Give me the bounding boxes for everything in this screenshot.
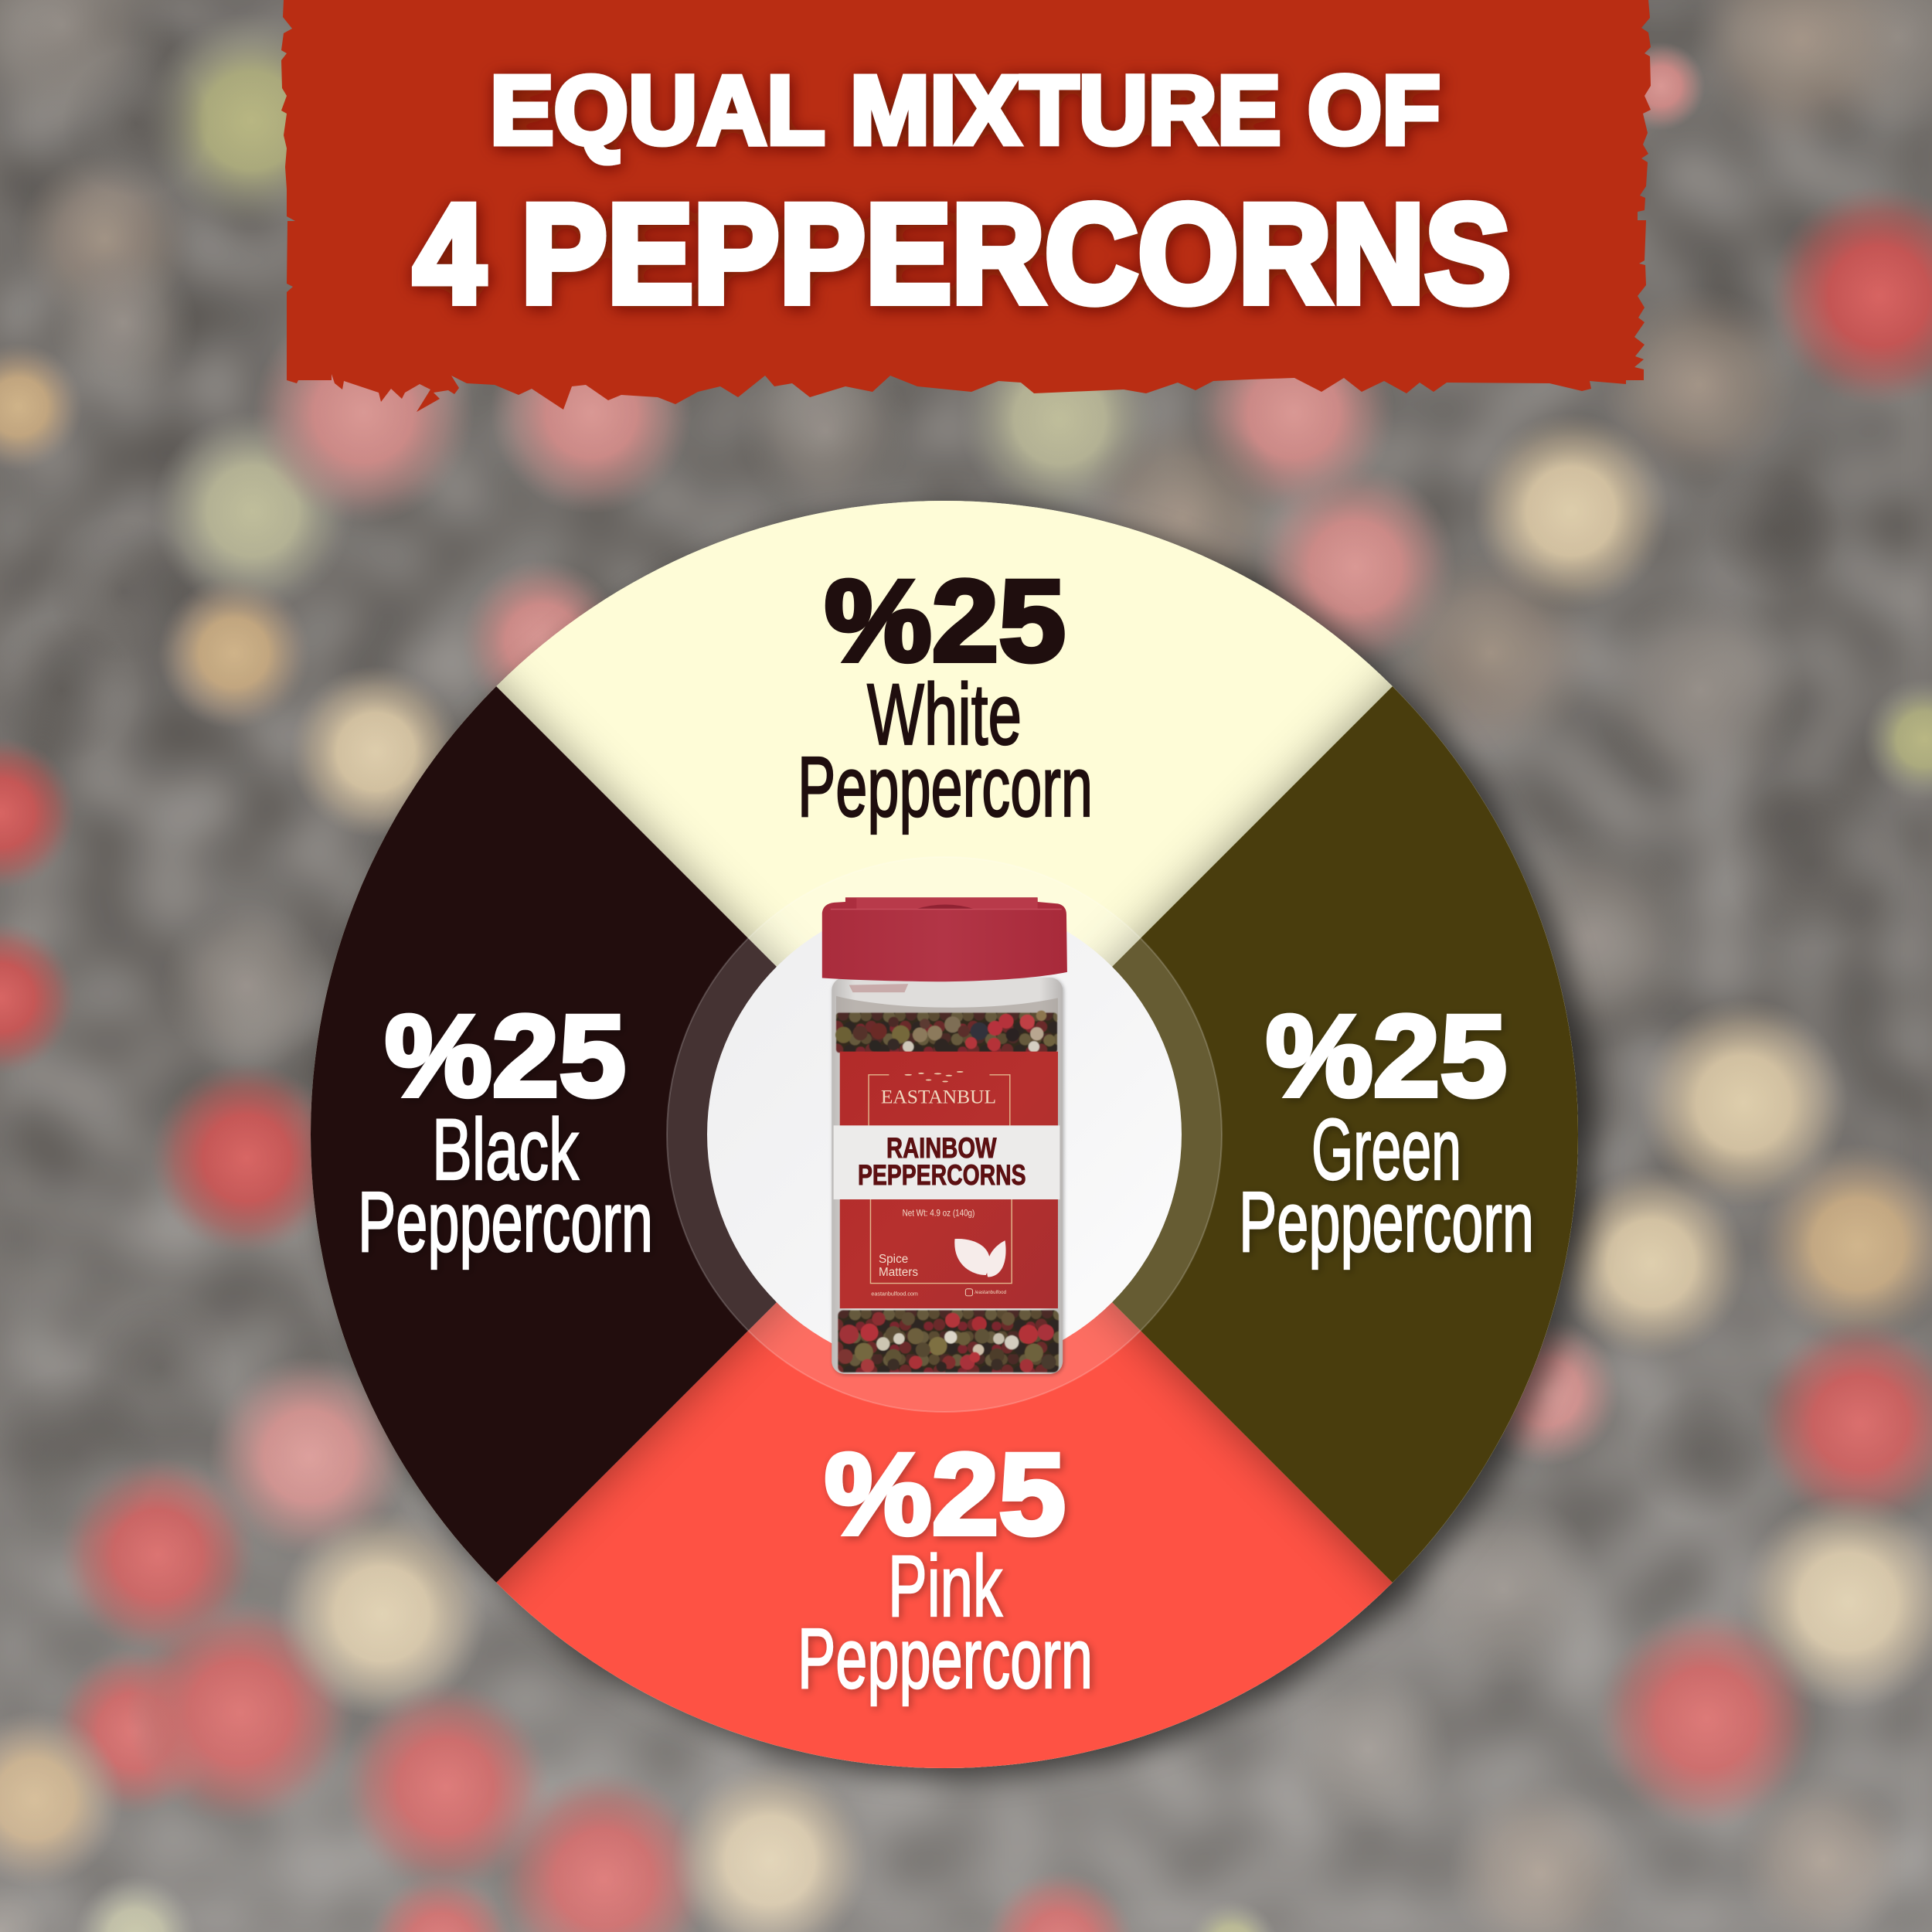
- jar cap: [822, 897, 1067, 981]
- title line 2: 4 PEPPERCORNS: [413, 175, 1511, 332]
- label: black peppercorn: [358, 991, 653, 1270]
- label: green peppercorn: Green: [1311, 1101, 1461, 1198]
- label: green peppercorn: [1239, 991, 1534, 1270]
- banner shape: [281, 0, 1651, 412]
- label: black peppercorn: Peppercorn: [358, 1175, 653, 1270]
- banner: torn red header: [281, 0, 1651, 412]
- label: white peppercorn: %25: [825, 556, 1066, 685]
- label: pink peppercorn: %25: [825, 1429, 1066, 1559]
- label: green peppercorn: %25: [1266, 991, 1507, 1121]
- label: white peppercorn: [798, 556, 1093, 835]
- title line 1: EQUAL MIXTURE OF: [490, 56, 1440, 165]
- label: white peppercorn: White: [867, 666, 1022, 763]
- jar body: [832, 978, 1063, 1374]
- label: pink peppercorn: [798, 1429, 1093, 1706]
- tagline: [879, 1253, 918, 1279]
- tagline: Spice: [879, 1253, 908, 1266]
- label: green peppercorn: Peppercorn: [1239, 1175, 1534, 1270]
- sector: black peppercorn: [311, 665, 798, 1604]
- label: pink peppercorn: Pink: [888, 1538, 1003, 1634]
- sector: green peppercorn: [1090, 665, 1578, 1604]
- social handle: /eastanbulfood: [975, 1290, 1007, 1295]
- product name: PEPPERCORNS: [858, 1158, 1026, 1191]
- sector: white peppercorn: [496, 501, 1393, 686]
- label: white peppercorn: Peppercorn: [798, 740, 1093, 835]
- peppercorns: bottom band: [838, 1310, 1059, 1372]
- shoulder reflections: [836, 996, 1058, 1020]
- icon: leaves: [954, 1239, 1006, 1277]
- centre plate: [707, 897, 1182, 1372]
- label: black peppercorn: Black: [432, 1101, 580, 1198]
- peppercorns: top band: [835, 1011, 1057, 1053]
- net weight: Net Wt: 4.9 oz (140g): [903, 1208, 975, 1219]
- sector: pink peppercorn: [496, 1302, 1393, 1768]
- website: eastanbulfood.com: [871, 1291, 918, 1297]
- white band: [834, 1125, 1060, 1199]
- translucent ring: [667, 857, 1222, 1412]
- label: black peppercorn: %25: [385, 991, 626, 1121]
- product jar: [822, 897, 1067, 1374]
- red label: [840, 1052, 1058, 1308]
- birds: [904, 1071, 964, 1082]
- tagline: Matters: [879, 1266, 918, 1279]
- pie chart: four equal peppercorn sectors: [306, 493, 1607, 1793]
- product name: [858, 1131, 1026, 1191]
- social handle: [965, 1289, 1007, 1296]
- brand: Eastanbul: EASTANBUL: [881, 1087, 996, 1108]
- product name: RAINBOW: [886, 1131, 997, 1164]
- gold frame: [869, 1075, 1012, 1284]
- label: pink peppercorn: Peppercorn: [798, 1611, 1093, 1706]
